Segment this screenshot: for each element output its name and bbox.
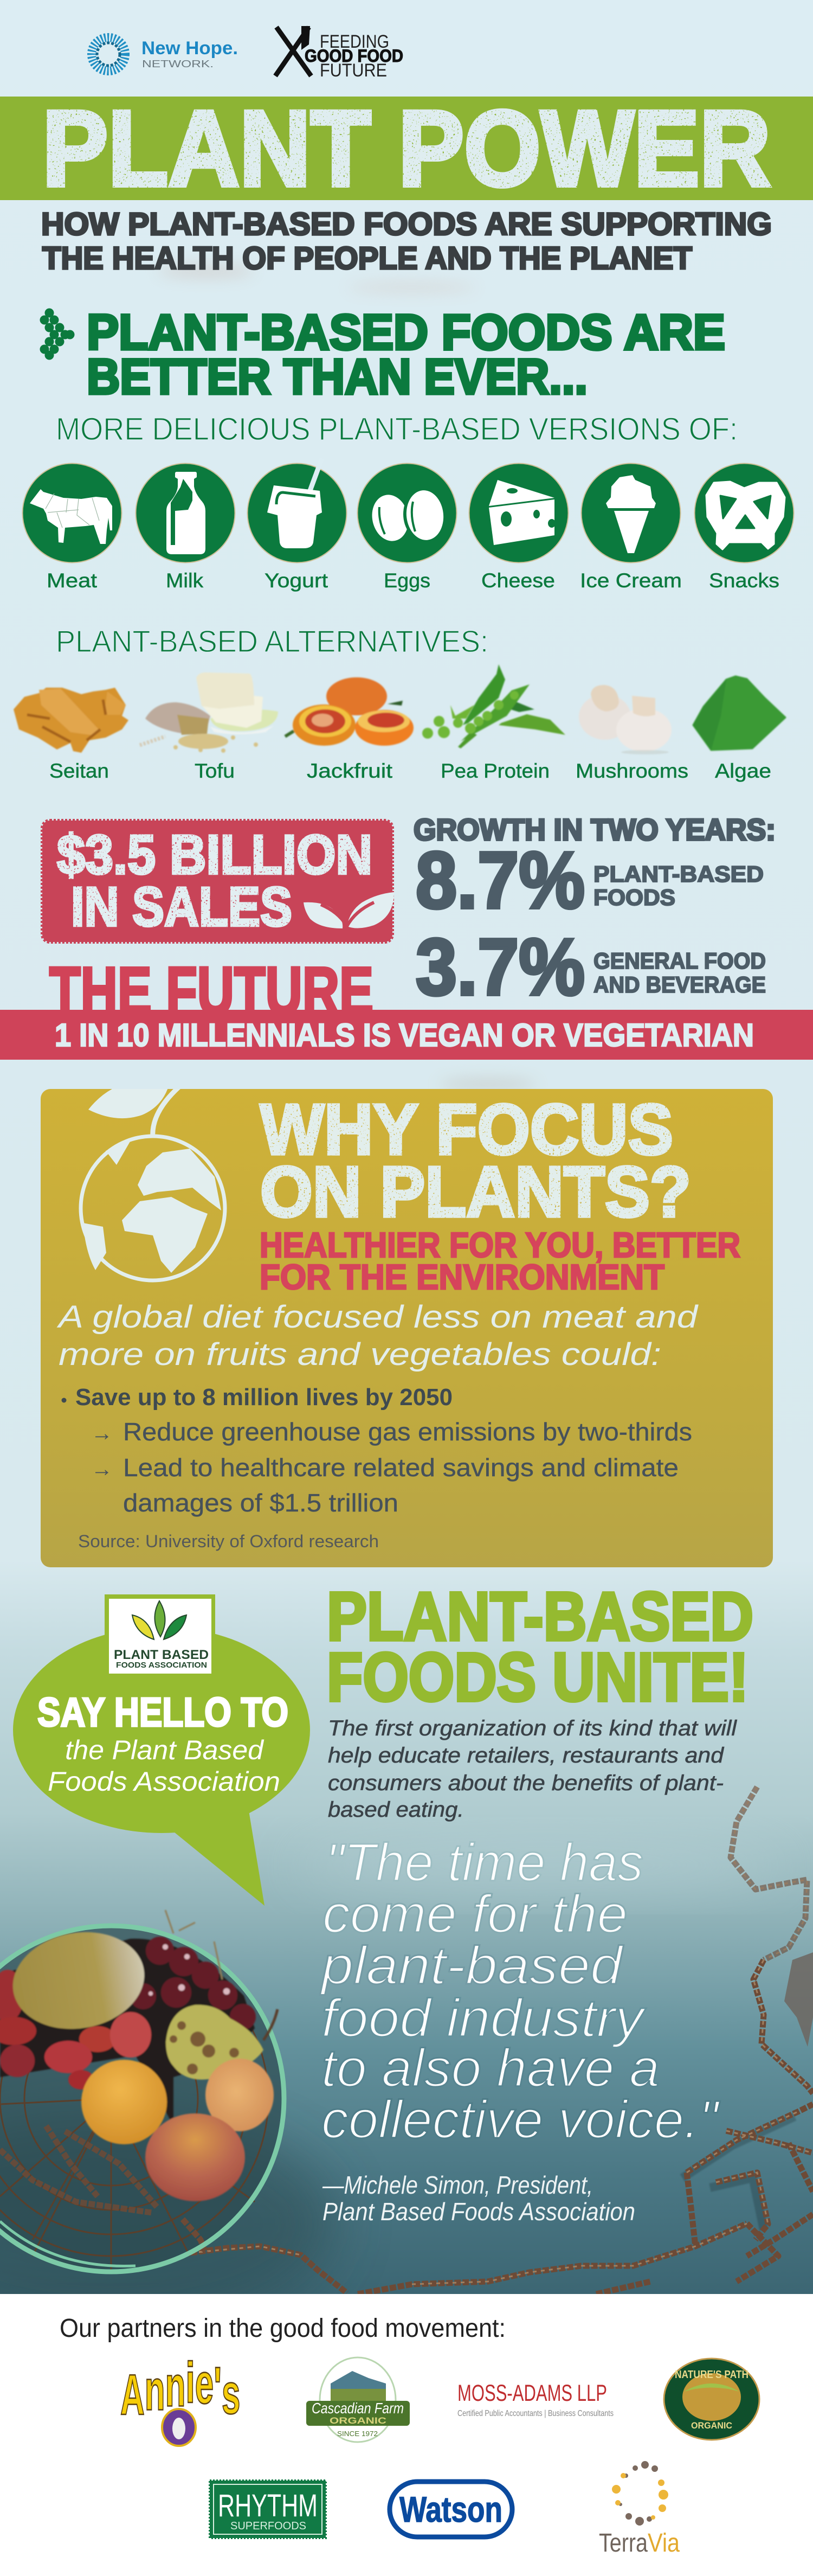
quote bbox=[320, 1832, 720, 2149]
food: seitan bbox=[14, 688, 128, 753]
labels: alternatives: Mushrooms bbox=[576, 760, 688, 782]
icon row: plant-based versions bbox=[23, 458, 793, 563]
logo: Feeding the Good Food Future bbox=[275, 26, 403, 81]
labels: versions: Eggs bbox=[384, 569, 430, 592]
quote: plant-based bbox=[320, 1936, 624, 1995]
speech bubble: say hello bbox=[13, 1594, 310, 1906]
stat: plant-based foods: PLANT-BASED bbox=[593, 861, 764, 887]
logo: Cascadian Farm: SINCE 1972 bbox=[337, 2430, 378, 2438]
list: benefits: Reduce greenhouse gas emissions by two-thirds bbox=[123, 1418, 692, 1446]
labels: versions: Meat bbox=[47, 569, 98, 592]
icon: eggs bbox=[358, 463, 456, 563]
attribution: —Michele Simon, President, bbox=[322, 2171, 593, 2199]
icon: ice cream bbox=[581, 463, 681, 563]
fruit bbox=[0, 1910, 278, 2201]
text: say hello: the Plant Based bbox=[65, 1735, 264, 1765]
photo: fruit basket and chains bbox=[0, 1787, 813, 2294]
labels: versions: Milk bbox=[166, 569, 204, 592]
logo: Cascadian Farm: ORGANIC bbox=[330, 2415, 386, 2426]
food: algae bbox=[693, 676, 785, 750]
text: first organization bbox=[328, 1716, 737, 1822]
food: tofu bbox=[140, 672, 278, 753]
logo: Cascadian Farm bbox=[306, 2357, 410, 2442]
text: global diet: A global diet focused less on meat and bbox=[56, 1299, 699, 1335]
logo: TerraVia: Terra bbox=[599, 2529, 648, 2558]
logo: Watson: Watson bbox=[399, 2489, 502, 2529]
text: sales: IN SALES bbox=[71, 876, 292, 938]
logo: plant based foods association: PLANT BASED bbox=[114, 1648, 209, 1662]
quote: come for the bbox=[322, 1884, 628, 1944]
logo: Feeding the Good Food Future: FEEDING bbox=[320, 31, 389, 52]
section heading: better than ever: BETTER THAN EVER... bbox=[87, 349, 588, 405]
labels: versions: Ice Cream bbox=[580, 569, 682, 592]
text: partners heading: Our partners in the good food movement: bbox=[60, 2314, 506, 2343]
logo: Moss Adams: Certified Public Accountants | Business Consultants bbox=[457, 2409, 614, 2418]
source: Source: University of Oxford research bbox=[78, 1531, 379, 1551]
panel: sales bbox=[42, 821, 394, 942]
attribution: Plant Based Foods Association bbox=[322, 2197, 635, 2226]
subheading: healthier: HEALTHIER FOR YOU, BETTER bbox=[260, 1225, 740, 1265]
logo: Cascadian Farm: Cascadian Farm bbox=[312, 2400, 404, 2417]
text: sales: $3.5 BILLION bbox=[57, 824, 372, 886]
food: mushrooms bbox=[579, 685, 672, 754]
food: pea protein bbox=[422, 664, 565, 748]
list: benefits: Lead to healthcare related savings and climate bbox=[123, 1453, 679, 1482]
text: first organization: based eating. bbox=[328, 1798, 464, 1822]
logo: plant based foods association bbox=[105, 1594, 215, 1676]
stat: plant-based foods: 8.7% bbox=[416, 836, 585, 925]
list: benefits: → bbox=[91, 1421, 113, 1445]
logo: Rhythm Superfoods bbox=[210, 2481, 326, 2538]
heading: the future: THE FUTURE bbox=[49, 954, 373, 1029]
text: sales bbox=[57, 824, 372, 938]
list: benefits: damages of $1.5 trillion bbox=[123, 1489, 398, 1517]
logo: Annie's: Annie's bbox=[120, 2351, 240, 2427]
text: first organization: consumers about the benefits of plant- bbox=[328, 1771, 724, 1795]
stat: plant-based foods: FOODS bbox=[593, 885, 675, 910]
quote: to also have a bbox=[321, 2038, 660, 2098]
panel: why focus on plants bbox=[41, 1085, 773, 1567]
logo: Watson bbox=[390, 2482, 512, 2537]
heading: why focus: WHY FOCUS bbox=[260, 1090, 673, 1169]
labels: versions: Snacks bbox=[709, 569, 779, 592]
icon: meat bbox=[23, 463, 121, 563]
stat: general food and beverage bbox=[416, 922, 766, 1012]
title: PLANT POWER bbox=[42, 88, 771, 208]
icon: leaves bbox=[304, 892, 394, 928]
band: millennials: 1 IN 10 MILLENNIALS IS VEGAN OR VEGETARIAN bbox=[55, 1017, 754, 1053]
text: first organization: help educate retailers, restaurants and bbox=[328, 1744, 725, 1767]
stat: general food and beverage: GENERAL FOOD bbox=[593, 948, 766, 973]
heading: why focus bbox=[260, 1090, 691, 1232]
logo: Rhythm Superfoods: RHYTHM bbox=[218, 2488, 318, 2523]
logo: New Hope Network bbox=[92, 37, 238, 71]
stat: general food and beverage: 3.7% bbox=[416, 922, 585, 1012]
logo: Nature's Path: ORGANIC bbox=[691, 2420, 732, 2431]
logo: plant based foods association: FOODS ASSOCIATION bbox=[116, 1661, 207, 1670]
heading: plant-based alternatives: PLANT-BASED ALTERNATIVES: bbox=[56, 624, 488, 659]
title band bbox=[0, 88, 813, 208]
text: first organization: The first organization of its kind that will bbox=[328, 1716, 737, 1740]
logo: Feeding the Good Food Future: GOOD FOOD bbox=[305, 46, 403, 66]
labels: alternatives: Pea Protein bbox=[441, 760, 550, 782]
logo: Nature's Path: NATURE'S PATH bbox=[675, 2369, 749, 2381]
quote: "The time has bbox=[326, 1832, 643, 1892]
basket bbox=[0, 1926, 284, 2272]
chains bbox=[191, 1787, 813, 2294]
icon: yogurt bbox=[247, 458, 347, 563]
logo: TerraVia: Via bbox=[648, 2529, 680, 2558]
subheading: healthier: FOR THE ENVIRONMENT bbox=[260, 1257, 664, 1297]
section heading: better than ever bbox=[87, 305, 725, 405]
list: benefits bbox=[62, 1384, 692, 1517]
band: millennials bbox=[0, 1010, 813, 1060]
logo: Nature's Path bbox=[664, 2359, 759, 2440]
labels: versions: Yogurt bbox=[264, 569, 328, 592]
logo: TerraVia bbox=[599, 2461, 680, 2558]
text: say hello: Foods Association bbox=[48, 1766, 280, 1797]
labels: alternatives: Jackfruit bbox=[307, 760, 393, 782]
icon: dot arrow bbox=[40, 308, 75, 360]
subtitle: HOW PLANT-BASED FOODS ARE SUPPORTING bbox=[41, 207, 772, 242]
text: global diet: more on fruits and vegetables could: bbox=[59, 1337, 661, 1372]
icon: globe with leaf bbox=[81, 1085, 225, 1280]
food: jackfruit bbox=[285, 677, 414, 746]
labels: alternatives: Algae bbox=[715, 760, 771, 782]
logo: Feeding the Good Food Future: FUTURE bbox=[320, 60, 387, 81]
heading: plant-based foods unite bbox=[327, 1578, 753, 1715]
icon: snacks bbox=[695, 463, 793, 563]
labels: alternatives bbox=[49, 760, 771, 782]
list: benefits: → bbox=[91, 1457, 113, 1481]
logo: New Hope Network: New Hope. bbox=[141, 38, 238, 59]
text: say hello bbox=[37, 1689, 288, 1797]
subtitle bbox=[41, 207, 772, 276]
logo: Moss Adams bbox=[457, 2380, 614, 2418]
list: benefits: Save up to 8 million lives by 2050 bbox=[75, 1384, 453, 1411]
icon: cheese bbox=[469, 463, 568, 563]
heading: more delicious versions: MORE DELICIOUS PLANT-BASED VERSIONS OF: bbox=[56, 412, 738, 447]
text: growth in two years: GROWTH IN TWO YEARS: bbox=[414, 812, 776, 847]
quote: collective voice." bbox=[321, 2090, 720, 2149]
section heading: better than ever: PLANT-BASED FOODS ARE bbox=[87, 305, 725, 360]
heading: why focus: ON PLANTS? bbox=[260, 1152, 691, 1232]
subtitle: THE HEALTH OF PEOPLE AND THE PLANET bbox=[42, 241, 692, 276]
icon: milk bbox=[136, 463, 235, 563]
heading: plant-based foods unite: FOODS UNITE! bbox=[327, 1639, 749, 1715]
attribution bbox=[322, 2171, 635, 2226]
food photos: alternatives bbox=[14, 664, 785, 754]
labels: versions bbox=[47, 569, 779, 592]
labels: alternatives: Tofu bbox=[195, 760, 235, 782]
stat: plant-based foods bbox=[416, 836, 764, 925]
subheading: healthier bbox=[260, 1225, 740, 1297]
labels: versions: Cheese bbox=[481, 569, 555, 592]
logo: Rhythm Superfoods: SUPERFOODS bbox=[230, 2520, 306, 2532]
logo: Moss Adams: MOSS-ADAMS LLP bbox=[457, 2380, 607, 2406]
logo: New Hope Network: NETWORK. bbox=[142, 59, 214, 69]
labels: alternatives: Seitan bbox=[49, 760, 109, 782]
quote: food industry bbox=[321, 1988, 646, 2048]
stat: general food and beverage: AND BEVERAGE bbox=[593, 972, 766, 997]
text: say hello: SAY HELLO TO bbox=[37, 1689, 288, 1735]
text: global diet bbox=[56, 1299, 699, 1372]
heading: plant-based foods unite: PLANT-BASED bbox=[327, 1578, 753, 1655]
